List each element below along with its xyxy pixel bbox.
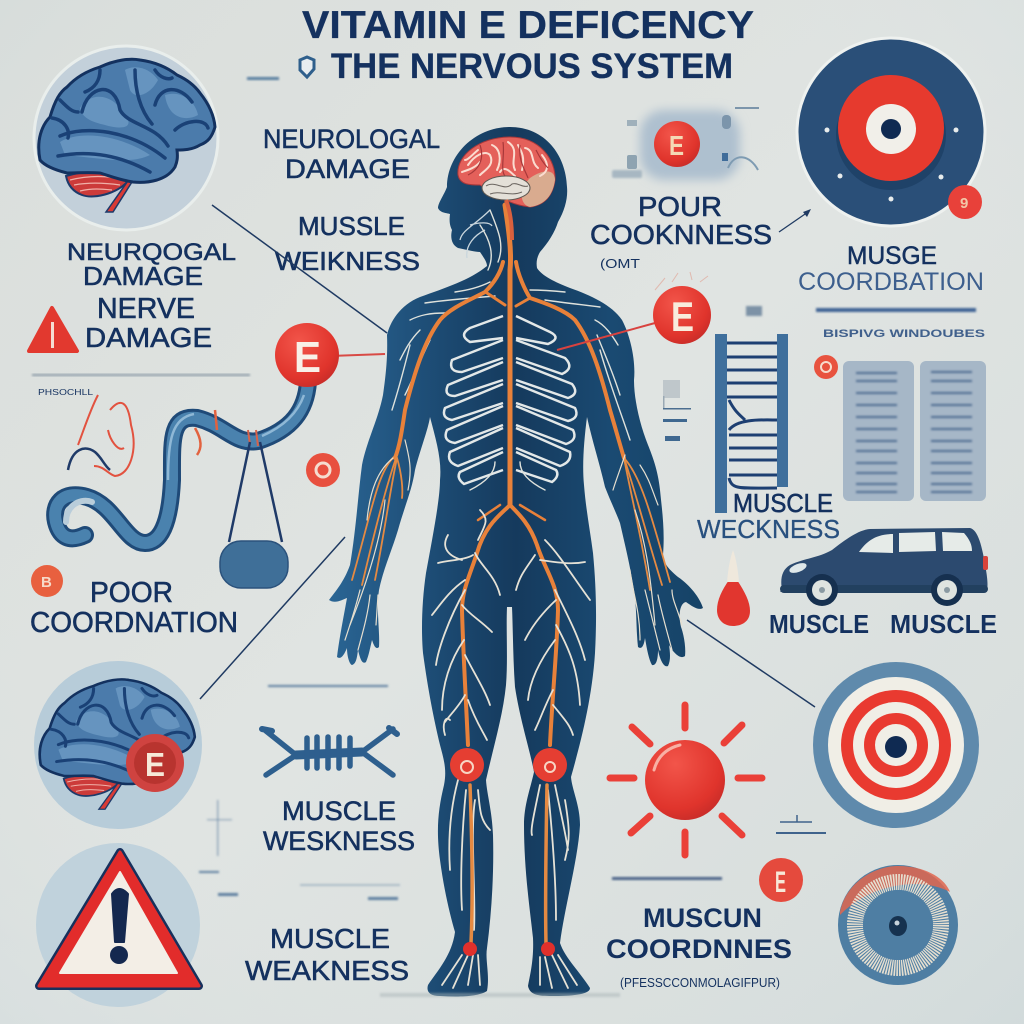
icon: warning triangle bbox=[36, 843, 200, 1007]
text: muscle weakness right bbox=[697, 488, 840, 544]
text: poor coordination bbox=[30, 577, 238, 639]
text: poor coordination: POOR bbox=[90, 577, 173, 609]
icon: car bbox=[780, 528, 988, 606]
text: muscle coordination right bbox=[798, 242, 984, 296]
text: muscle muscle: MUSCLE bbox=[769, 609, 869, 639]
icon: small warning triangle bbox=[29, 308, 77, 351]
text: muscle muscle: MUSCLE bbox=[890, 609, 997, 639]
text: muscle coordination bottom: COORDNNES bbox=[606, 934, 792, 964]
icon: title bullet bbox=[247, 57, 314, 80]
connector: hand to target bbox=[687, 620, 815, 707]
weight bbox=[220, 541, 288, 588]
text: muscle weakness top: WEIKNESS bbox=[275, 246, 420, 276]
subhead rule and caption bbox=[816, 308, 985, 340]
icon: muscle ladder bbox=[715, 334, 788, 513]
connector: E left to arm bbox=[330, 354, 385, 356]
badge: small red poor coordination: B bbox=[41, 574, 52, 591]
text: muscle weakness bottom: WEAKNESS bbox=[245, 955, 409, 986]
ribs bbox=[444, 316, 576, 484]
icon: muscle fibre bbox=[262, 728, 397, 775]
text: muscle weakness top bbox=[275, 211, 420, 276]
text: muscle weakness right: MUSCLE bbox=[733, 488, 833, 518]
text: muscle weakness right: WECKNESS bbox=[697, 514, 840, 544]
text: muscle weakness bottom bbox=[245, 923, 409, 986]
body silhouette bbox=[329, 127, 703, 996]
text: nerve damage: NERVE bbox=[97, 293, 195, 325]
text: poor coordination top right bbox=[590, 191, 772, 250]
cerebellum bbox=[482, 176, 530, 200]
orange nerves lower legs bbox=[470, 785, 547, 943]
badge: E right bbox=[653, 272, 711, 344]
text: neurological damage top: DAMAGE bbox=[285, 154, 410, 184]
panel: top left brain bbox=[34, 46, 218, 230]
badge: E on brain: E bbox=[145, 746, 165, 783]
text: small bar above muscle coordination bbox=[612, 877, 722, 880]
text: neurological damage top bbox=[263, 124, 440, 184]
badge: small red panel bbox=[814, 355, 838, 379]
white nerves in legs bbox=[432, 510, 590, 988]
badge: dial bbox=[948, 185, 982, 219]
text: nerve damage bbox=[85, 293, 212, 353]
badge: E left bbox=[275, 323, 339, 387]
title: THE NERVOUS SYSTEM bbox=[331, 47, 733, 86]
text: small note: (OMT bbox=[600, 256, 640, 271]
icon: dotted eye bbox=[838, 865, 958, 985]
title: VITAMIN E DEFICENCY bbox=[302, 4, 754, 47]
badge: small red left bbox=[306, 453, 340, 487]
text: neurological damage left: NEURQOGAL bbox=[67, 239, 236, 266]
text: nerve damage: DAMAGE bbox=[85, 322, 212, 353]
decorative smudges bbox=[199, 685, 400, 900]
ankle markers bbox=[463, 942, 555, 956]
brain in head bbox=[458, 137, 555, 240]
badge: E top centre: E bbox=[669, 130, 684, 161]
badge: E bottom bbox=[759, 858, 803, 902]
badge: E bottom: E bbox=[775, 866, 786, 899]
text: small caption bottom right: (PFESSCCONMOLAGIFPUR) bbox=[620, 975, 780, 990]
white nerves upper bbox=[392, 210, 630, 490]
text: muscle weakness bottom: MUSCLE bbox=[270, 923, 390, 954]
floor shadow bbox=[380, 993, 620, 997]
red squiggle bbox=[78, 395, 134, 476]
figure: human body bbox=[329, 127, 703, 996]
text: poor coordination top right: POUR bbox=[638, 191, 722, 222]
icon: bullseye target bbox=[813, 662, 979, 828]
text: muscle coordination right: MUSGE bbox=[847, 242, 937, 270]
text: muscle coordination right: COORDBATION bbox=[798, 268, 984, 296]
text: neurological damage left bbox=[67, 239, 236, 291]
badge: E left: E bbox=[294, 333, 321, 382]
text: muscle weakness middle: MUSCLE bbox=[282, 796, 396, 826]
decorative marks near right arm bbox=[663, 306, 762, 441]
panel: muscle stripes right bbox=[920, 361, 986, 501]
badge: dial: 9 bbox=[960, 195, 968, 212]
orange nerve trunk bbox=[395, 205, 624, 745]
ear and head detail bbox=[460, 210, 492, 258]
panel: red dial top right bbox=[797, 38, 985, 226]
mark: small rule bbox=[776, 815, 826, 833]
text: muscle weakness middle bbox=[263, 796, 415, 856]
panel: E capsule top centre bbox=[612, 107, 759, 180]
text: muscle weakness top: MUSSLE bbox=[298, 211, 405, 241]
connector: E right to chest bbox=[557, 323, 655, 350]
text: muscle muscle bbox=[769, 609, 997, 639]
divider: left rule bbox=[32, 374, 250, 376]
text: small caption left: PHSOCHLL bbox=[38, 388, 94, 397]
panel: muscle stripes left bbox=[843, 361, 914, 501]
text: neurological damage left: DAMAGE bbox=[83, 261, 203, 291]
brain illustration bbox=[39, 59, 215, 212]
connector: hand to lower brain bbox=[200, 537, 345, 699]
text: neurological damage top: NEUROLOGAL bbox=[263, 124, 440, 154]
arrow: to dial bbox=[779, 209, 811, 232]
brain illustration bbox=[40, 679, 195, 809]
text: muscle weakness middle: WESKNESS bbox=[263, 826, 415, 856]
icon: nerve tube and weight bbox=[55, 382, 308, 588]
badge: E on brain bbox=[126, 734, 184, 792]
icon: red sun bbox=[610, 705, 762, 855]
text: poor coordination top right: COOKNNESS bbox=[590, 219, 772, 250]
icon: red drop bbox=[717, 550, 750, 626]
text: poor coordination: COORDNATION bbox=[30, 607, 238, 639]
badge: E top centre bbox=[654, 121, 700, 167]
arm nerve fans bbox=[345, 440, 682, 650]
subhead rule and caption: BISPIVG WINDOUBES bbox=[823, 328, 985, 340]
knee markers bbox=[450, 748, 567, 782]
title bbox=[302, 4, 754, 86]
text: muscle coordination bottom bbox=[606, 903, 792, 964]
weight straps bbox=[229, 442, 282, 542]
badge: E right: E bbox=[671, 293, 694, 340]
panel: lower left brain bbox=[34, 661, 202, 829]
badge: small red poor coordination bbox=[31, 565, 63, 597]
text: muscle coordination bottom: MUSCUN bbox=[643, 903, 762, 933]
connector: brain to shoulder bbox=[212, 205, 387, 333]
